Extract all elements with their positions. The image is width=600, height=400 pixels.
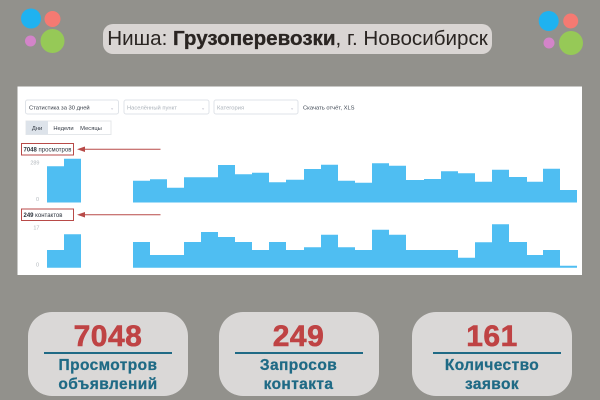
axis labels: contacts — [33, 226, 40, 268]
dropdown: period: Статистика за 30 дней — [29, 104, 90, 112]
tabs: days, weeks, months — [26, 121, 111, 134]
dropdown: category — [214, 100, 298, 114]
axis labels: views — [30, 160, 40, 203]
title: Ниша: Грузоперевозки, г. Новосибирск — [107, 27, 488, 50]
card: orders: Количество — [445, 357, 539, 374]
dropdown: category: ⌄ — [290, 106, 294, 112]
arrow: contacts — [77, 212, 160, 218]
axis labels: views: 289 — [30, 160, 40, 166]
download link: Скачать отчёт, XLS — [303, 106, 355, 112]
dropdown: locality: ⌄ — [201, 106, 205, 112]
card: contact requests: контакта — [264, 376, 333, 393]
callout: contacts total: 249 контактов — [24, 213, 62, 219]
bar chart: contacts — [47, 224, 577, 268]
tabs: days, weeks, months: Дни — [32, 126, 42, 132]
logo: left dots — [21, 8, 64, 53]
card: views: Просмотров — [59, 357, 157, 374]
card: orders: заявок — [465, 376, 519, 393]
logo: right dots — [538, 11, 583, 55]
card: contact requests: Запросов — [260, 357, 337, 374]
axis labels: views: 0 — [36, 197, 39, 203]
tabs: days, weeks, months: Недели — [53, 126, 74, 132]
card: views: объявлений — [58, 376, 158, 393]
card: views — [28, 312, 188, 396]
callout: views total — [22, 144, 74, 155]
card: contact requests — [218, 312, 378, 396]
dropdown: period: ⌄ — [110, 106, 114, 112]
card: orders — [412, 312, 572, 396]
dropdown: period — [26, 100, 118, 114]
axis labels: contacts: 0 — [36, 262, 39, 268]
dropdown: locality: Населённый пункт — [127, 104, 177, 112]
card: views: 7048 — [74, 320, 142, 353]
arrow: views — [77, 146, 160, 152]
tabs: days, weeks, months: Месяцы — [80, 126, 102, 132]
callout: contacts total — [22, 209, 74, 220]
dropdown: locality — [124, 100, 209, 114]
card: contact requests: 249 — [273, 320, 324, 353]
bar chart: views — [47, 159, 577, 202]
dropdown: category: Категория — [217, 106, 244, 112]
axis labels: contacts: 17 — [33, 226, 40, 232]
panel: statistics screenshot — [18, 86, 582, 275]
callout: views total: 7048 просмотров — [24, 148, 71, 154]
card: orders: 161 — [466, 320, 518, 353]
